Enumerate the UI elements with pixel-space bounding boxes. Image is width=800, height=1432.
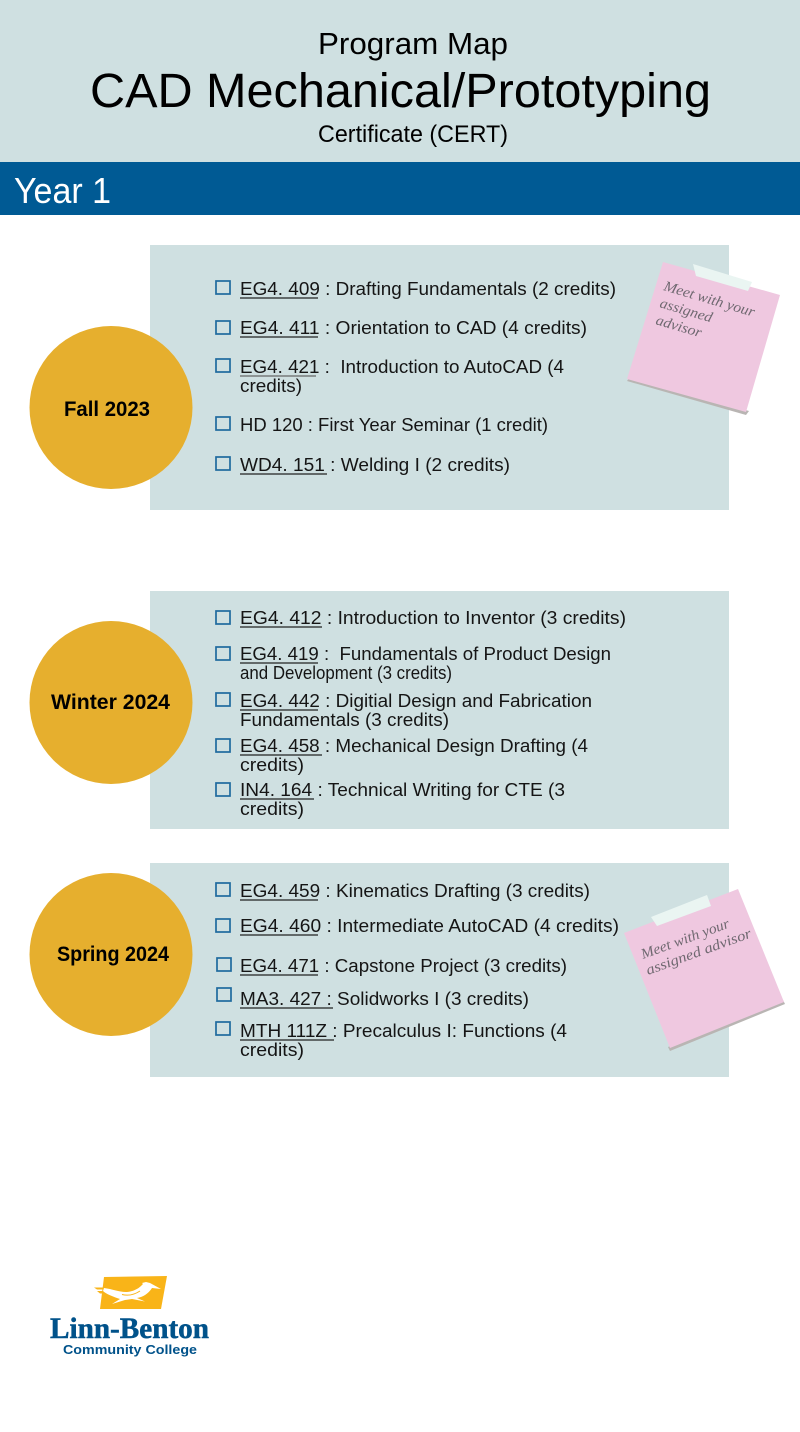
course list: spring: credits) (240, 1039, 304, 1060)
badge: fall 2023: Fall 2023 (64, 398, 150, 421)
logo mark: roadrunner (94, 1276, 167, 1309)
panel: fall 2023 (30, 245, 729, 510)
course list: fall: credits) (240, 375, 302, 396)
course list: winter: and Development (3 credits) (240, 662, 452, 683)
course list: spring: EG4. 459 : Kinematics Drafting (3 credits) (240, 880, 590, 901)
badge: spring 2024: Spring 2024 (57, 943, 169, 966)
course list: winter: EG4. 458 : Mechanical Design Drafting (4 (240, 735, 588, 756)
course list: winter: credits) (240, 754, 304, 775)
logo wordmark: Linn-Benton (50, 1312, 209, 1345)
course list: winter: EG4. 442 : Digitial Design and Fabrication (240, 690, 592, 711)
logo: linn-benton community college (50, 1276, 209, 1357)
sticky note: fall (627, 262, 780, 415)
sticky note: spring (624, 889, 785, 1051)
course list: spring (216, 880, 619, 1060)
course list: winter: Fundamentals (3 credits) (240, 709, 449, 730)
tape (693, 264, 752, 291)
panel: winter 2024 (30, 591, 729, 829)
logo tagline: Community College (63, 1342, 197, 1357)
badge: spring 2024 (30, 873, 192, 1036)
year 1 band (0, 162, 800, 215)
note text: Meet with your (638, 916, 732, 963)
note text (638, 916, 754, 979)
note text: advisor (654, 312, 704, 341)
course list: winter: EG4. 412 : Introduction to Inventor (3 credits) (240, 607, 626, 628)
course list: spring: EG4. 460 : Intermediate AutoCAD (4 credits) (240, 915, 619, 936)
course list: fall: EG4. 409 : Drafting Fundamentals (2 credits) (240, 278, 616, 299)
course list: spring: MA3. 427 : Solidworks I (3 credits) (240, 988, 529, 1009)
panel: spring 2024 (30, 863, 729, 1077)
title: program map: Program Map (318, 26, 508, 61)
badge: winter 2024: Winter 2024 (51, 691, 170, 714)
tape (651, 895, 711, 926)
note text (654, 278, 757, 341)
course list: winter: EG4. 419 : Fundamentals of Product Design (240, 643, 611, 664)
badge: winter 2024 (30, 621, 192, 784)
course list: spring: EG4. 471 : Capstone Project (3 credits) (240, 955, 567, 976)
year 1 band: Year 1 (14, 170, 111, 211)
note text: assigned advisor (644, 926, 754, 979)
course list: fall: EG4. 411 : Orientation to CAD (4 credits) (240, 317, 587, 338)
subtitle: certificate: Certificate (CERT) (318, 121, 508, 148)
course list: winter: IN4. 164 : Technical Writing for CTE (3 (240, 779, 565, 800)
badge: fall 2023 (30, 326, 192, 489)
header (0, 0, 800, 162)
note text: assigned (658, 295, 715, 326)
course list: winter (216, 607, 626, 819)
title: program name: CAD Mechanical/Prototyping (90, 65, 711, 118)
course list: fall: HD 120 : First Year Seminar (1 credit) (240, 414, 548, 435)
course list: fall: EG4. 421 : Introduction to AutoCAD (4 (240, 356, 564, 377)
note text: Meet with your (661, 278, 757, 321)
course list: fall (216, 278, 616, 475)
course list: spring: MTH 111Z : Precalculus I: Functions (4 (240, 1020, 567, 1041)
course list: fall: WD4. 151 : Welding I (2 credits) (240, 454, 510, 475)
course list: winter: credits) (240, 798, 304, 819)
